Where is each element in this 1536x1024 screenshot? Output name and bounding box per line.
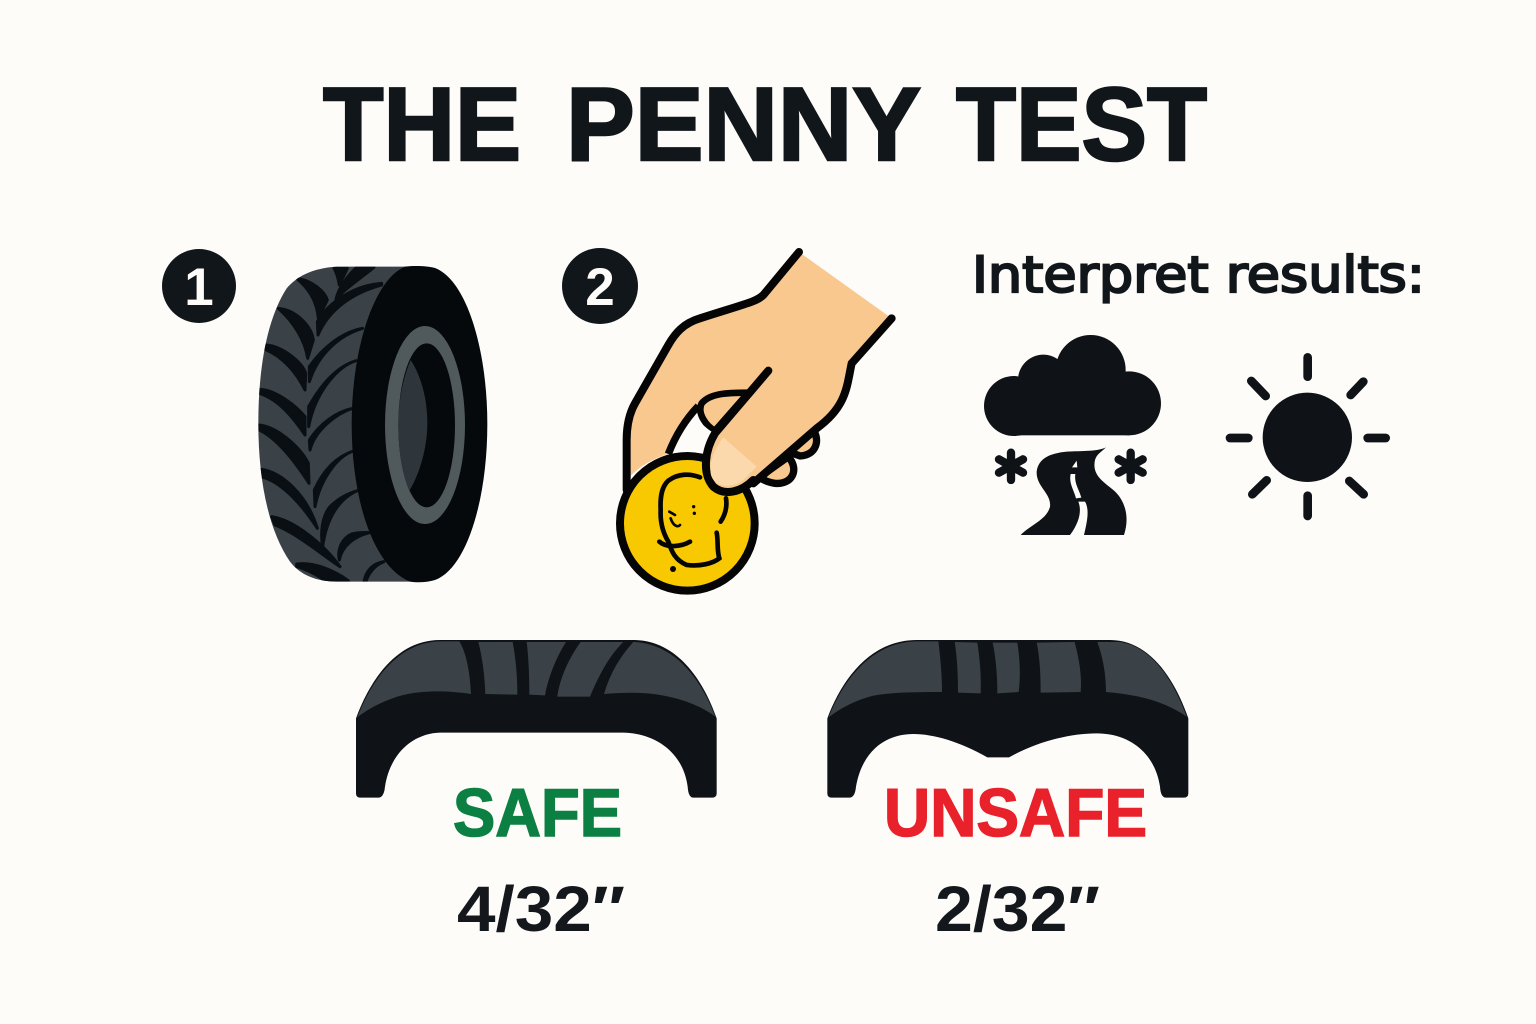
icon: sun bbox=[1230, 357, 1386, 516]
title: TEST bbox=[956, 67, 1207, 183]
step 2 badge bbox=[562, 248, 638, 324]
icon: tire bbox=[258, 266, 487, 582]
safe tread cross-section bbox=[356, 640, 717, 798]
title: PENNY bbox=[566, 67, 921, 183]
step 1 badge bbox=[162, 249, 236, 323]
penny bbox=[620, 456, 755, 591]
index finger bbox=[706, 371, 768, 492]
icon: snow cloud and winding road bbox=[984, 335, 1161, 535]
step 1 badge: 1 bbox=[184, 258, 214, 317]
unsafe label: UNSAFE bbox=[884, 775, 1147, 851]
heading: interpret results: Interpret results: bbox=[972, 246, 1425, 304]
title bbox=[323, 67, 1207, 183]
safe depth value: 4/32″ bbox=[457, 873, 625, 945]
unsafe tread cross-section bbox=[827, 640, 1188, 798]
step 2 badge: 2 bbox=[585, 258, 615, 317]
icon: hand holding penny bbox=[620, 252, 892, 591]
hand outline bbox=[627, 252, 799, 490]
title: THE bbox=[323, 67, 521, 183]
small fingers bbox=[759, 430, 817, 483]
thumb bbox=[700, 393, 748, 431]
unsafe depth value: 2/32″ bbox=[935, 873, 1100, 945]
safe label: SAFE bbox=[453, 775, 622, 851]
hand body bbox=[627, 252, 892, 492]
